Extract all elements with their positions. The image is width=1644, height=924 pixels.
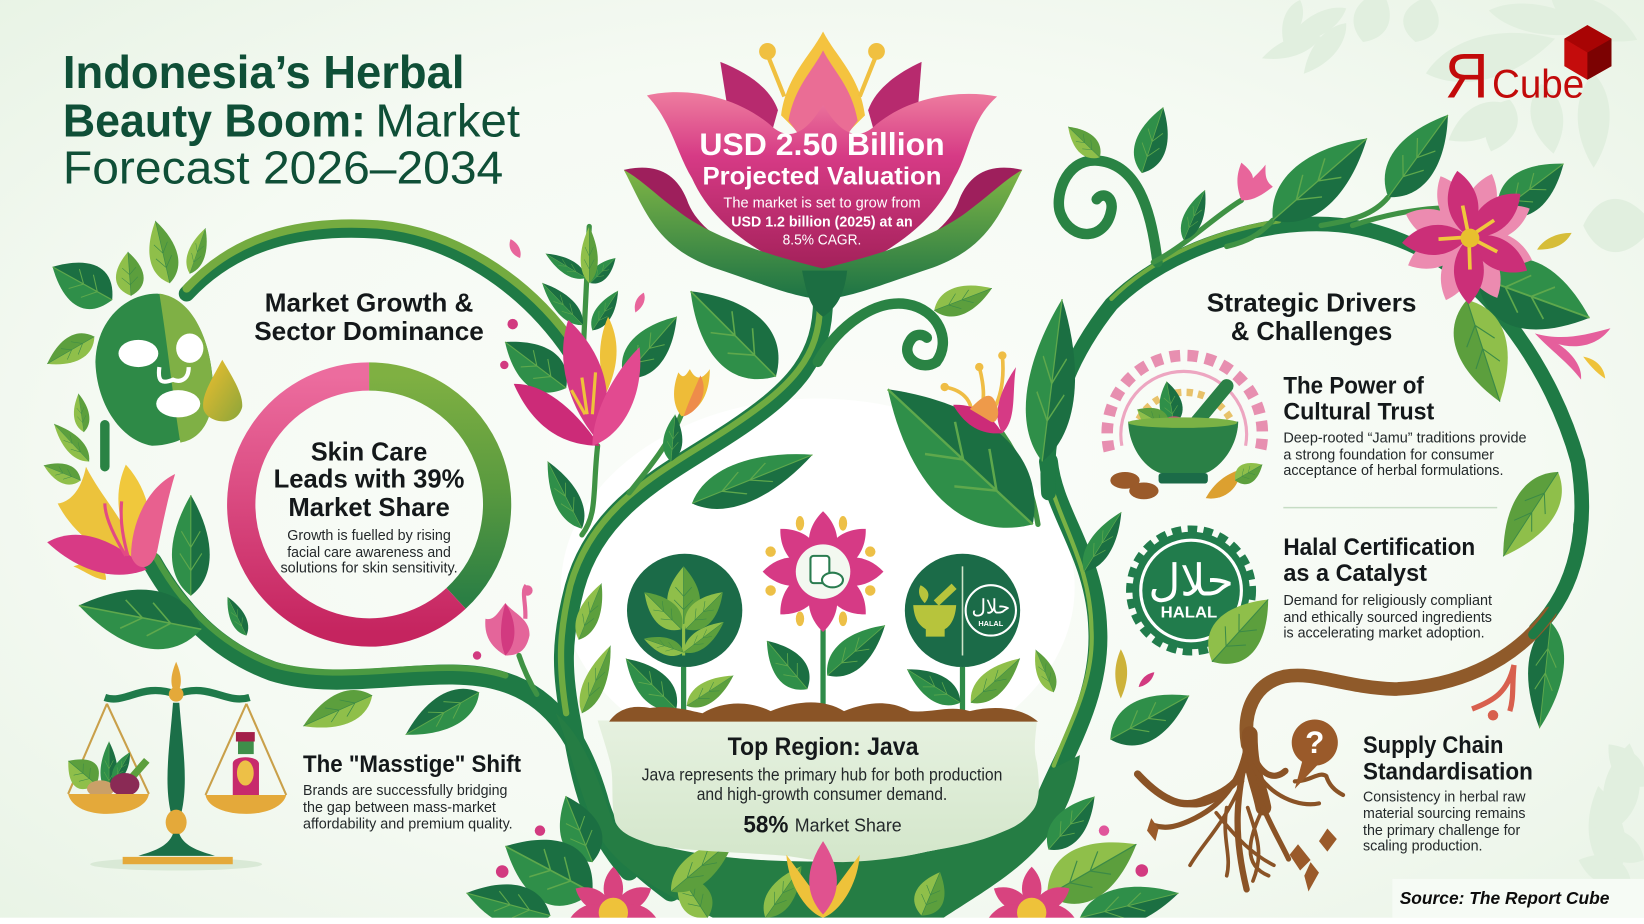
donut text: solutions for skin sensitivity. bbox=[280, 560, 458, 577]
text: halal certification: and ethically sourced ingredients bbox=[1283, 609, 1492, 626]
heading: market growth: Market Growth & bbox=[265, 287, 473, 317]
logo: RCube: Я bbox=[1445, 42, 1489, 112]
logo: RCube bbox=[1445, 25, 1611, 112]
flower: lotus callout bbox=[624, 31, 1022, 317]
flower: small yellow tulip bbox=[674, 369, 710, 416]
panel: top region java: Top Region: Java bbox=[728, 733, 919, 761]
title: Beauty Boom: bbox=[63, 94, 366, 146]
text: cultural trust: acceptance of herbal formulations. bbox=[1283, 462, 1504, 479]
title: Indonesia’s Herbal bbox=[63, 46, 464, 98]
text: supply chain: Consistency in herbal raw bbox=[1363, 788, 1526, 805]
donut text: facial care awareness and bbox=[287, 544, 451, 561]
flower: small pink tulip bbox=[485, 585, 533, 656]
text: halal certification: is accelerating market adoption. bbox=[1283, 625, 1485, 642]
text: halal certification: as a Catalyst bbox=[1283, 560, 1427, 587]
source strip: Source: The Report Cube bbox=[1400, 888, 1610, 908]
vines bbox=[105, 160, 1582, 891]
icon: halal badge: HALAL bbox=[1161, 605, 1218, 622]
panel: top region java bbox=[598, 702, 1039, 862]
vine: right top spiral bbox=[1059, 160, 1158, 262]
plant: mortar and halal circle bbox=[900, 554, 1028, 714]
centre plants bbox=[615, 511, 1028, 720]
panel: top region java: Java represents the primary hub for both production bbox=[642, 764, 1002, 784]
soil bbox=[609, 702, 1038, 722]
text: masstige shift: Brands are successfully bridging bbox=[303, 782, 507, 799]
flower: centre left lily bbox=[514, 317, 640, 446]
text: cultural trust bbox=[1283, 372, 1527, 479]
callout text: 8.5% CAGR. bbox=[783, 232, 861, 248]
text: cultural trust: The Power of bbox=[1283, 372, 1425, 399]
vine: centre spiral bbox=[818, 303, 943, 365]
flower: top right pink tulip bbox=[1237, 163, 1273, 200]
icon: halal badge bbox=[1130, 530, 1286, 678]
icon: roots bbox=[1138, 524, 1578, 889]
text: supply chain: Standardisation bbox=[1363, 758, 1533, 785]
plant: mortar and halal circle: حلال bbox=[971, 597, 1010, 619]
panel: top region java: and high-growth consumer demand. bbox=[697, 784, 947, 804]
icon: question bubble bbox=[1292, 719, 1338, 789]
text: supply chain: the primary challenge for bbox=[1363, 822, 1520, 839]
vine: thin branches bbox=[519, 197, 1499, 694]
text: halal certification: Halal Certification bbox=[1283, 534, 1475, 561]
text: masstige shift: the gap between mass-market bbox=[303, 799, 497, 816]
heading: strategic drivers: & Challenges bbox=[1231, 316, 1392, 346]
right pan bottle bbox=[233, 732, 259, 795]
soft accents: petals and dots bbox=[73, 233, 1610, 878]
donut text bbox=[274, 436, 464, 577]
logo: RCube: Cube bbox=[1492, 63, 1584, 107]
bottom foliage bbox=[461, 713, 1183, 924]
plant: pink flower with jar bbox=[755, 511, 895, 699]
decorative background foliage: bottom right bbox=[1574, 735, 1644, 892]
vine: right arch bbox=[1048, 221, 1582, 629]
text: supply chain: Supply Chain bbox=[1363, 732, 1504, 759]
heading: strategic drivers: Strategic Drivers bbox=[1207, 287, 1416, 317]
icon: balance scale bbox=[59, 662, 286, 871]
text: supply chain: material sourcing remains bbox=[1363, 805, 1526, 822]
icon: oil drop bbox=[203, 360, 242, 421]
plant: mortar and halal circle: HALAL bbox=[978, 619, 1004, 628]
icon: green face mask bbox=[95, 294, 242, 446]
title: Market bbox=[375, 94, 520, 146]
flowers: bottom row bbox=[569, 841, 1076, 924]
donut text: Leads with 39% bbox=[274, 464, 464, 494]
icon: question bubble: ? bbox=[1305, 725, 1324, 760]
callout text: USD 2.50 Billion bbox=[699, 127, 945, 162]
source strip bbox=[0, 879, 1644, 924]
text: cultural trust: Deep-rooted “Jamu” traditions provide bbox=[1283, 430, 1527, 447]
decorative background foliage: top right bbox=[1259, 0, 1644, 252]
text: halal certification bbox=[1283, 534, 1493, 642]
text: supply chain: scaling production. bbox=[1363, 838, 1483, 855]
text: masstige shift bbox=[303, 751, 521, 833]
callout text: Projected Valuation bbox=[702, 163, 942, 191]
callout text: The market is set to grow from bbox=[723, 196, 921, 212]
vine: upper left arc bbox=[187, 224, 576, 353]
leaves bbox=[40, 102, 1601, 758]
panel: top region java: 58% bbox=[743, 812, 788, 839]
icon: root debris bbox=[1147, 818, 1337, 891]
heading: market growth bbox=[254, 287, 484, 346]
vine: right centre stem bbox=[923, 461, 1098, 876]
donut chart: 39% skin care bbox=[241, 377, 497, 632]
icon: jamu mortar with mandala bbox=[1107, 355, 1267, 499]
callout text: USD 1.2 billion (2025) at an bbox=[731, 215, 913, 231]
heading: market growth: Sector Dominance bbox=[254, 316, 484, 346]
title: Forecast 2026–2034 bbox=[63, 142, 503, 194]
text: masstige shift: affordability and premium quality. bbox=[303, 816, 513, 833]
flower: left lily bbox=[47, 465, 175, 575]
title bbox=[63, 46, 520, 194]
callout text bbox=[699, 127, 945, 248]
donut text: Growth is fuelled by rising bbox=[287, 527, 451, 544]
plant: leaf circle bbox=[615, 554, 962, 720]
donut text: Skin Care bbox=[311, 436, 427, 466]
text: cultural trust: a strong foundation for consumer bbox=[1283, 446, 1494, 463]
donut text: Market Share bbox=[288, 492, 450, 522]
left pan contents bbox=[59, 742, 147, 797]
text: supply chain bbox=[1363, 732, 1533, 855]
text: masstige shift: The "Masstige" Shift bbox=[303, 751, 521, 778]
vine: lotus stem to centre left bbox=[561, 299, 823, 871]
icon: spices bbox=[1110, 472, 1140, 489]
icon: halal badge: حلال bbox=[1148, 557, 1234, 606]
vine: left lower branch bbox=[105, 425, 671, 891]
flower: top right star flower bbox=[1401, 168, 1537, 305]
heading: strategic drivers bbox=[1207, 287, 1416, 346]
flower: right small lily bbox=[940, 351, 1016, 433]
text: halal certification: Demand for religiously compliant bbox=[1283, 592, 1493, 609]
panel: top region java: Market Share bbox=[795, 815, 902, 836]
text: cultural trust: Cultural Trust bbox=[1283, 399, 1434, 426]
central white clearing bbox=[561, 399, 1075, 776]
